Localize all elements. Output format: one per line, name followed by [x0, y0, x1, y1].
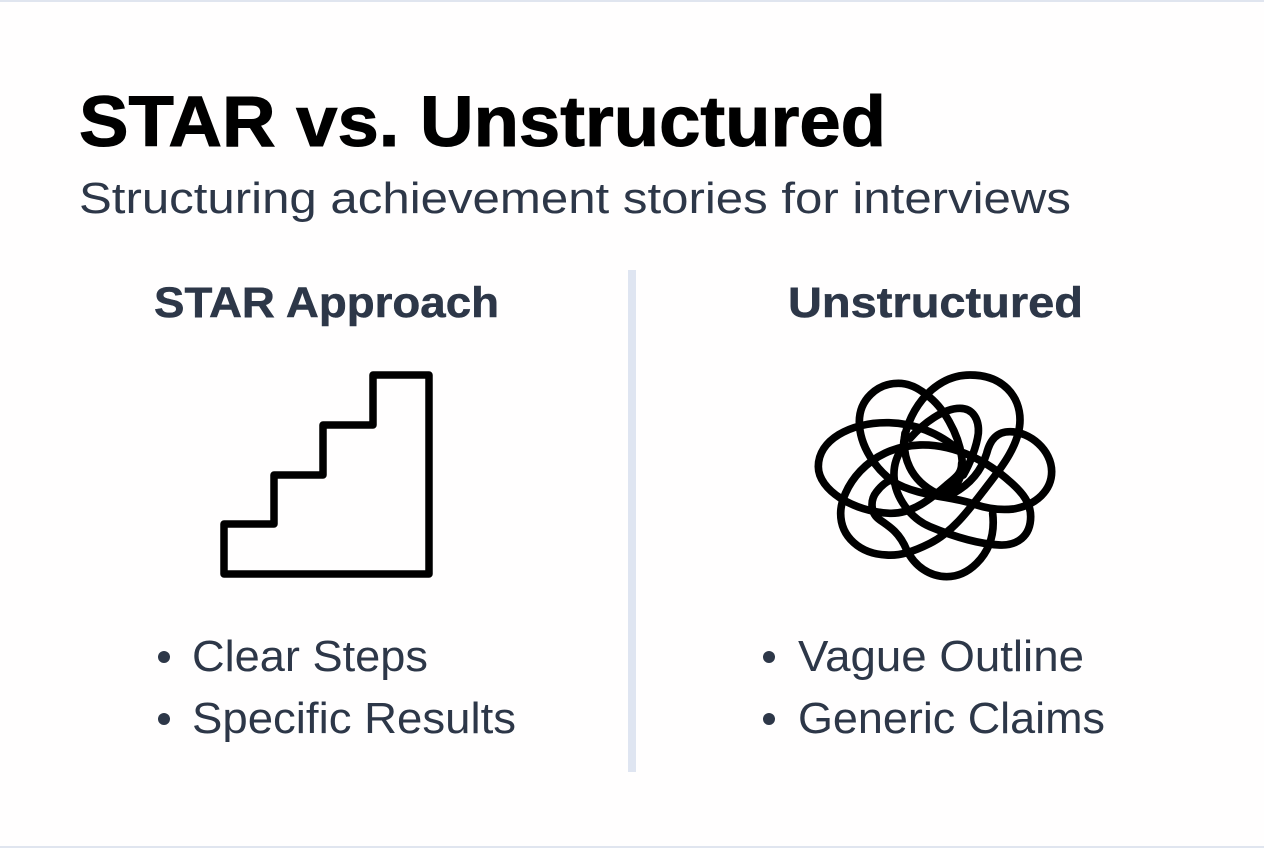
heading: STAR Approach: STAR Approach — [154, 279, 499, 327]
bullet list: unstructured drawbacks: Generic Claims — [798, 694, 1105, 743]
bullet list: STAR benefits: Clear Steps — [192, 632, 428, 681]
panel: STAR approach — [154, 279, 516, 743]
panel: unstructured — [763, 279, 1105, 743]
heading: Unstructured: Unstructured — [788, 279, 1083, 327]
bullet list: unstructured drawbacks: Vague Outline — [798, 632, 1084, 681]
icon: tangled loops — [818, 375, 1052, 577]
subtitle: Structuring achievement stories for interviews — [79, 174, 1071, 223]
bullet list: unstructured drawbacks — [763, 632, 1105, 743]
divider — [628, 270, 636, 772]
bullet list: STAR benefits: Specific Results — [192, 694, 516, 743]
icon: staircase — [224, 375, 429, 574]
bullet list: STAR benefits — [158, 632, 516, 743]
title: STAR vs. Unstructured — [79, 83, 886, 162]
